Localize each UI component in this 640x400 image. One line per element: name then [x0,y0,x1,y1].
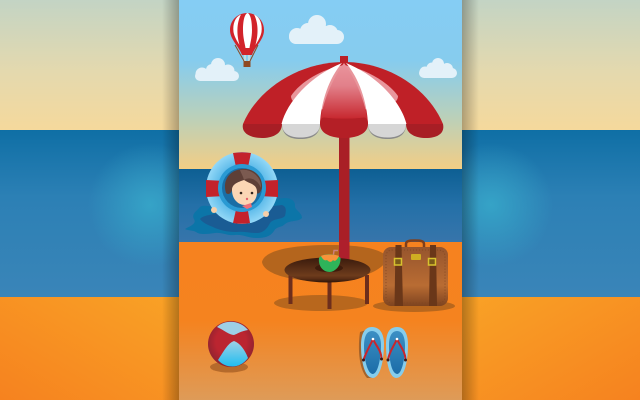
cloud: left [195,58,239,81]
child hair [225,169,262,194]
pole base [339,240,350,262]
beach ball shadow [210,362,248,372]
white panel right [346,63,406,124]
ring red bands [206,152,278,224]
darker water [200,205,286,233]
suitcase [383,240,448,306]
water splash [185,198,302,238]
cloud: top [289,15,344,44]
umbrella shadow [262,245,387,281]
centre panel [320,63,368,124]
sky [179,0,462,169]
scallop shadows [282,124,406,139]
flip flop: right [386,327,408,378]
umbrella pole [339,136,350,262]
white scallops [282,124,406,138]
white panel left [282,63,342,124]
coconut drink [315,250,343,272]
left background panel [0,0,179,400]
umbrella canopy [243,62,443,124]
red scallops [243,124,443,138]
right background panel [462,0,640,400]
suitcase shadow [373,300,455,312]
life ring with child [206,152,278,224]
ring [206,152,278,224]
flip flop shadows [359,330,372,378]
hands [211,207,269,217]
umbrella [243,56,443,139]
sand [179,242,462,400]
pale highlight arc [291,65,398,110]
ring hole [222,168,262,208]
swimsuit [242,203,252,209]
sea [179,169,462,242]
cloud: right [419,58,457,78]
table shadow [274,295,368,311]
ring inner band [218,164,266,212]
child eyes [240,192,253,194]
beach ball [208,321,254,367]
centre scallop [320,118,368,138]
hair highlight [240,170,261,188]
child face [232,180,257,205]
table [284,258,370,309]
flip flop: left [361,327,384,378]
child mouth [246,198,248,200]
hot air balloon [230,13,264,67]
